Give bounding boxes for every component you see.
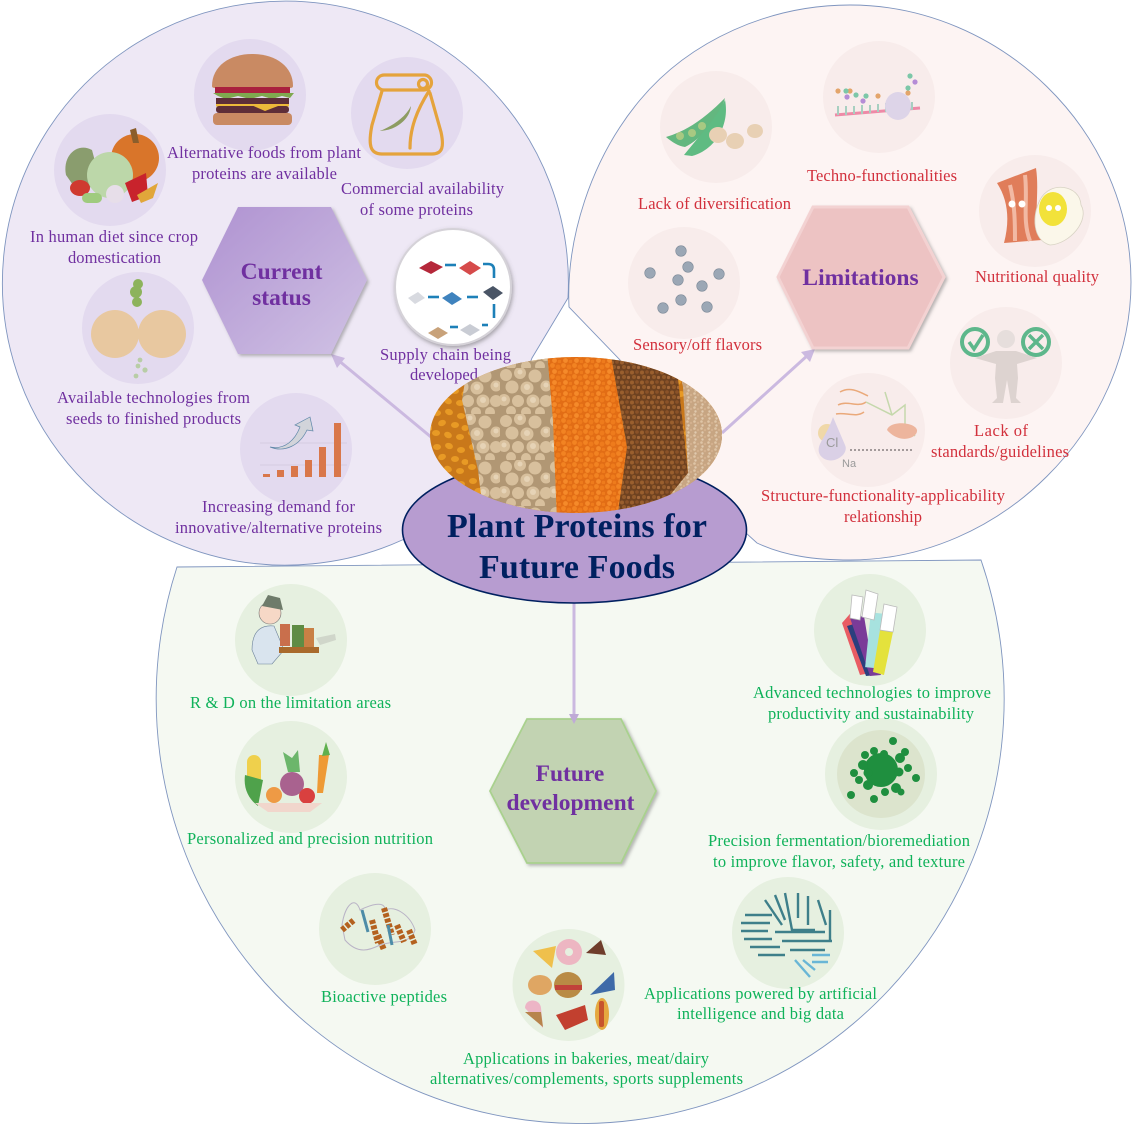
panel background: limitations	[569, 5, 1131, 560]
label: advanced technologies line 2: productivity and sustainability	[768, 704, 975, 723]
icon circle: structure function: Na	[842, 458, 857, 470]
icon circle: structure function	[811, 373, 925, 487]
label: human diet line 2: domestication	[68, 248, 161, 267]
arrow: center to future development	[569, 603, 579, 724]
icon circle: standards figure	[950, 307, 1062, 419]
icon circle: seeds to products	[82, 272, 194, 384]
label: AI applications line 2: intelligence and big data	[677, 1004, 845, 1023]
panel: limitations	[569, 5, 1131, 560]
icon circle: test tubes	[814, 574, 926, 686]
icon circle: veggie characters	[235, 721, 347, 833]
arrow: center to current status	[331, 354, 431, 437]
label: commercial availability line 2: of some proteins	[360, 200, 473, 219]
label: precision fermentation: Precision fermentation/bioremediation	[708, 831, 970, 850]
hexagon: current status: Current	[241, 259, 323, 285]
label: commercial availability: Commercial availability	[341, 179, 505, 198]
panel background: current status	[2, 1, 568, 565]
panel background: future development	[156, 560, 1004, 1124]
central title ellipse	[402, 457, 746, 603]
label: precision fermentation line 2: to improve flavor, safety, and texture	[713, 852, 965, 871]
panel: current status	[2, 1, 568, 565]
icon circle: growth chart	[240, 393, 352, 505]
label: alternative foods: Alternative foods from plant	[167, 143, 361, 162]
label: alternative foods line 2: proteins are available	[192, 164, 337, 183]
icon circle: fermentation dish	[825, 718, 937, 830]
label: increasing demand line 2: innovative/alternative proteins	[175, 518, 382, 537]
label: supply chain line 2: developed	[410, 365, 479, 384]
icon circle: food items	[512, 929, 624, 1041]
label: structure functionality: Structure-functionality-applicability	[761, 486, 1006, 505]
label: sensory flavors: Sensory/off flavors	[633, 335, 762, 354]
label: structure functionality line 2: relationship	[844, 507, 922, 526]
label: increasing demand: Increasing demand for	[202, 497, 356, 516]
hexagon: future development: development	[507, 790, 635, 816]
label: AI applications: Applications powered by artificial	[644, 984, 877, 1003]
central title ellipse: Future Foods	[479, 549, 675, 586]
hexagon: limitations	[778, 207, 944, 348]
label: nutritional quality: Nutritional quality	[975, 267, 1100, 286]
hexagon: current status	[202, 207, 367, 354]
label: available technologies line 2: seeds to finished products	[66, 409, 241, 428]
arrow: center to limitations	[722, 349, 815, 433]
icon circle: peptide structure	[319, 873, 431, 985]
hexagon: current status: status	[252, 285, 311, 311]
hexagon: future development: Future	[536, 761, 604, 787]
central title ellipse: Plant Proteins for	[447, 508, 707, 545]
icon circle: packaging bag	[351, 57, 463, 169]
label: available technologies: Available technologies from	[57, 388, 250, 407]
label: lack of diversification: Lack of diversification	[638, 194, 791, 213]
icon circle: protein strand	[823, 41, 935, 153]
icon circle: burger	[194, 39, 306, 151]
icon circle: AI brain	[732, 877, 844, 989]
central photo: grains and pulses	[430, 357, 722, 513]
icon circle: supply chain	[395, 229, 511, 345]
label: human diet: In human diet since crop	[30, 227, 198, 246]
label: advanced technologies: Advanced technologies to improve	[753, 683, 991, 702]
label: bakery applications line 2: alternatives/complements, sports supplements	[430, 1069, 743, 1088]
panel: future development	[156, 560, 1004, 1124]
label: lack of standards line 2: standards/guidelines	[931, 442, 1069, 461]
label: lack of standards: Lack of	[974, 421, 1028, 440]
icon circle: bacon and egg	[979, 155, 1091, 267]
label: personalized nutrition: Personalized and precision nutrition	[187, 829, 433, 848]
label: R and D: R & D on the limitation areas	[190, 693, 391, 712]
icon circle: peas and beans	[660, 71, 772, 183]
icon circle: vegetables	[54, 114, 166, 226]
icon circle: sensory molecules	[628, 227, 740, 339]
label: techno-functionalities: Techno-functionalities	[807, 166, 957, 185]
label: supply chain: Supply chain being	[380, 345, 511, 364]
icon circle: researcher	[235, 584, 347, 696]
icon circle: structure function: Cl	[826, 435, 838, 450]
label: bakery applications: Applications in bakeries, meat/dairy	[463, 1049, 710, 1068]
label: bioactive peptides: Bioactive peptides	[321, 987, 447, 1006]
hexagon: future development	[490, 719, 656, 863]
hexagon: limitations: Limitations	[802, 265, 919, 291]
